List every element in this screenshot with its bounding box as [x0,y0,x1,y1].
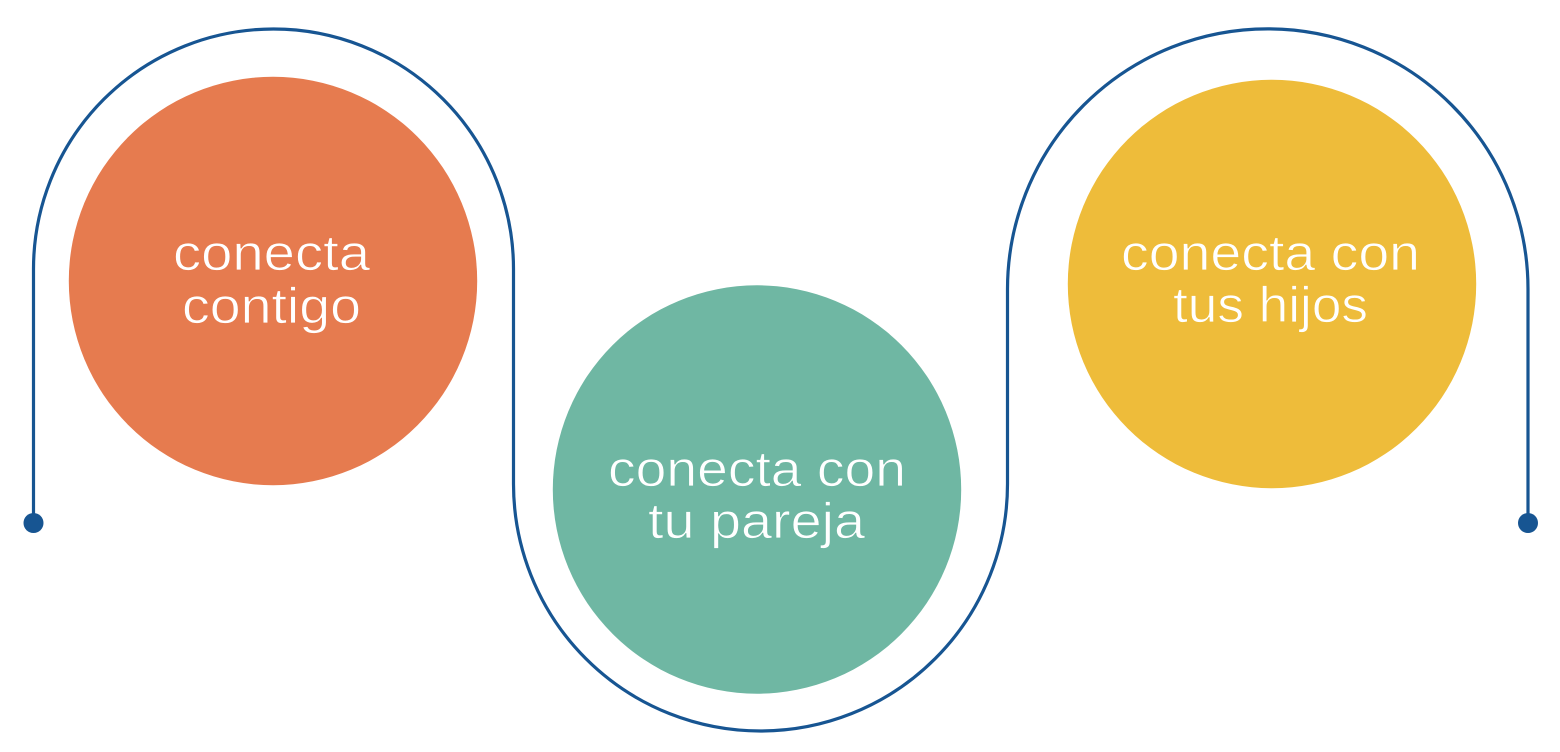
right end dot [1518,513,1538,533]
left end dot [24,513,44,533]
circle: conecta con tus hijos: conecta con [1121,225,1420,281]
circle: conecta contigo [69,77,477,485]
circle: conecta con tus hijos: tus hijos [1173,277,1368,333]
circle: conecta con tu pareja [553,285,961,694]
circle: conecta contigo: contigo [182,278,361,334]
circle: conecta con tu pareja: tu pareja [648,493,865,549]
circle: conecta con tus hijos [1068,80,1476,488]
circle: conecta con tu pareja: conecta con [608,441,906,497]
circle: conecta contigo: conecta [173,225,370,281]
